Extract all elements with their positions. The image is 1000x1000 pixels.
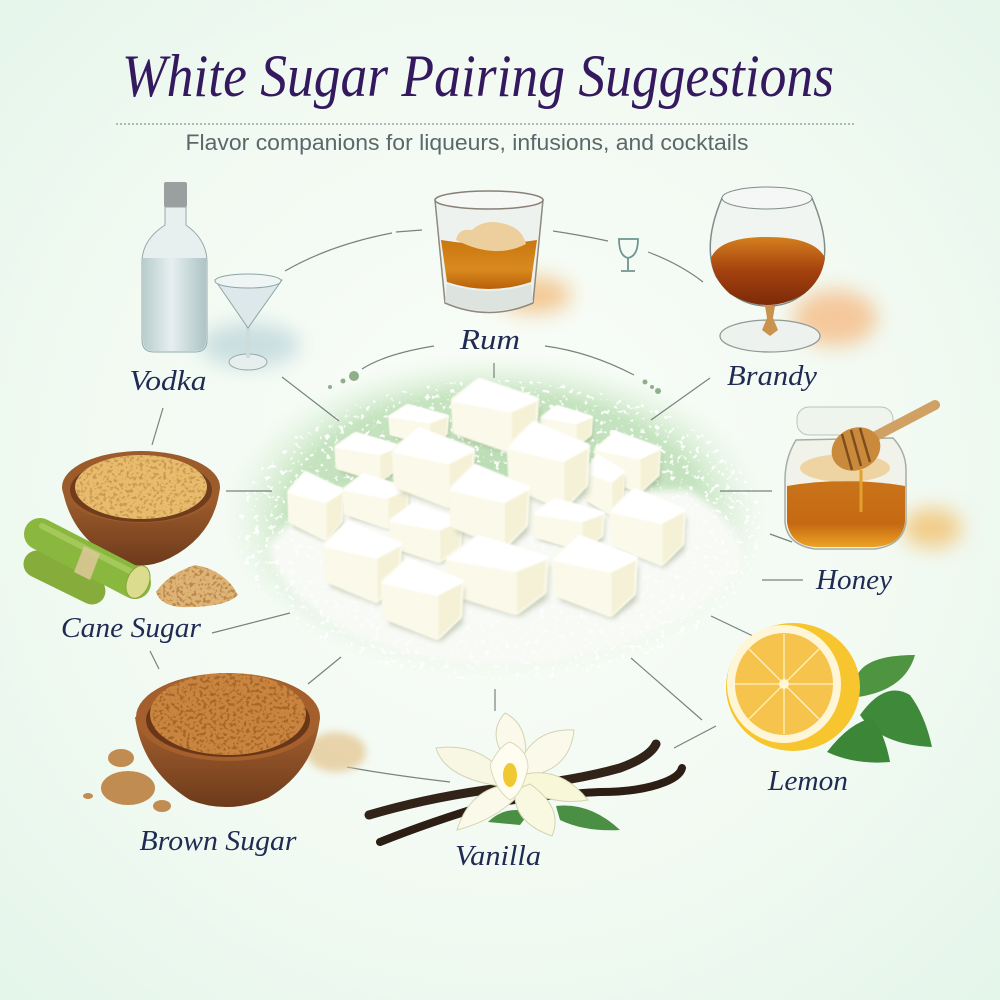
cane sugar bowl and stalks bbox=[37, 451, 238, 607]
sugar cubes bbox=[289, 380, 686, 642]
item labels bbox=[61, 324, 892, 872]
title: White Sugar Pairing Suggestions bbox=[122, 43, 834, 109]
brandy label: Brandy bbox=[727, 360, 817, 392]
honey label: Honey bbox=[815, 564, 892, 596]
lemon bbox=[726, 623, 932, 763]
rum label: Rum bbox=[459, 324, 520, 356]
brandy snifter bbox=[710, 187, 877, 352]
small glass icon bbox=[619, 239, 638, 271]
cane sugar label: Cane Sugar bbox=[61, 612, 202, 644]
lemon label: Lemon bbox=[767, 765, 848, 797]
rum glass bbox=[435, 191, 571, 313]
subtitle: Flavor companions for liqueurs, infusions, and cocktails bbox=[186, 130, 748, 155]
vanilla flower and pods bbox=[369, 713, 682, 842]
vodka label: Vodka bbox=[130, 365, 206, 397]
central sugar pile bbox=[220, 353, 770, 680]
vodka bottle and glass bbox=[142, 182, 300, 370]
honey jar bbox=[785, 405, 962, 549]
brown sugar label: Brown Sugar bbox=[140, 825, 297, 857]
decorative dots bbox=[328, 371, 661, 394]
vanilla label: Vanilla bbox=[455, 840, 541, 872]
connector lines bbox=[150, 230, 803, 782]
brown sugar bowl bbox=[83, 673, 366, 812]
